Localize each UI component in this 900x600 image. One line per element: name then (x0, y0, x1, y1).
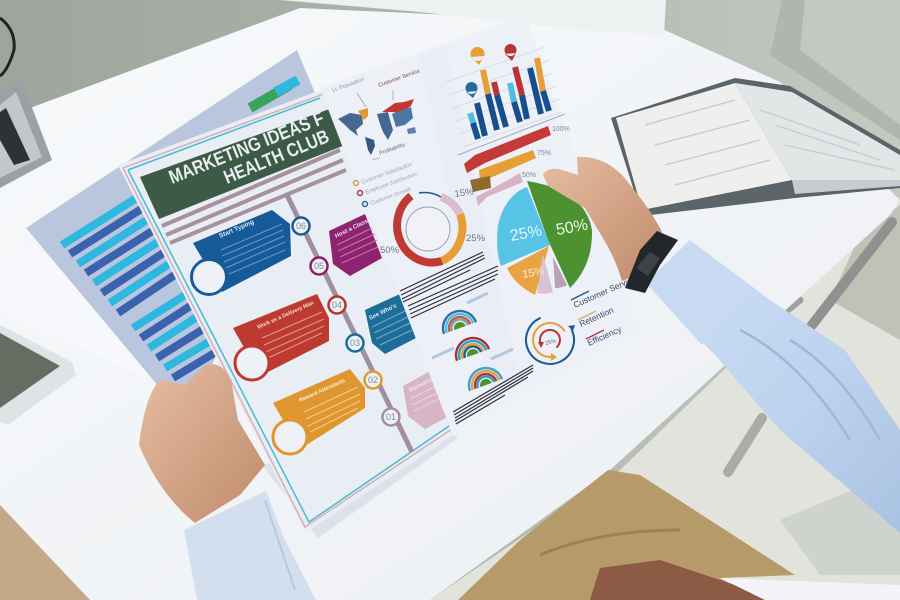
donut chart: 15% (454, 186, 475, 200)
pie chart: 25% (509, 223, 543, 245)
middle document: marketing ideas (118, 70, 458, 533)
title banner: HEALTH CLUB (221, 126, 332, 189)
border lines (123, 75, 455, 527)
right arm shirt sleeve (646, 240, 900, 533)
body text lines (400, 252, 533, 424)
chart captions (432, 293, 513, 359)
pie chart: 50% (555, 217, 589, 239)
card: marketing (403, 370, 449, 429)
card: marketing: Marketing (408, 377, 434, 394)
card: start typing: Start Typing (218, 219, 255, 240)
floor shadow (830, 205, 900, 340)
legend list (354, 162, 418, 207)
desk legs (700, 222, 892, 472)
card: host a class (329, 214, 382, 276)
card: see who's coming (365, 294, 416, 354)
left shirt cuff (184, 491, 316, 600)
floor under the desk (430, 200, 900, 600)
arrow legend: Efficiency (586, 324, 624, 348)
world map: Lt. Population (332, 77, 365, 94)
step 06: 06 (296, 221, 306, 231)
horizontal bars: 100% (552, 126, 570, 133)
step 03: 03 (350, 338, 360, 348)
step 01: 01 (386, 412, 396, 422)
back document with blue table (26, 50, 320, 412)
window frame (770, 0, 900, 140)
step 04 (328, 296, 346, 314)
notebook (611, 78, 900, 216)
pie chart: 15% (521, 265, 545, 281)
timeline spine (286, 193, 412, 452)
rainbow chart one (438, 306, 476, 334)
world map: Customer Service (378, 68, 421, 89)
trousers and chair (458, 470, 900, 600)
circular arrows (526, 318, 575, 364)
wooden floor corner (0, 505, 90, 600)
wristwatch (625, 231, 678, 293)
wire basket with scissors (0, 18, 52, 188)
card: see who's coming: See Who's (368, 303, 399, 322)
legend list: Customer Growth (370, 186, 412, 207)
rainbow chart two (451, 333, 489, 361)
top document: charts (320, 15, 638, 433)
horizontal bars: 75% (537, 150, 551, 157)
donut chart: 50% (380, 245, 400, 256)
donut chart (380, 186, 486, 263)
card: reward attendants (273, 369, 365, 454)
step 04: 04 (332, 300, 342, 310)
card: work as a delivery man (233, 294, 329, 380)
step 02: 02 (368, 375, 378, 385)
world map: Profitability (379, 142, 406, 157)
title banner: MARKETING IDEAS F (166, 108, 327, 189)
paper stack edge (262, 425, 458, 538)
monitor base (280, 0, 666, 34)
card: start typing (192, 210, 291, 294)
step 03 (346, 334, 364, 352)
step 05 (310, 258, 328, 274)
circular arrows: 25% (545, 338, 557, 347)
card: work as a delivery man: Work as a Delivery Man (256, 300, 315, 331)
donut chart: 25% (466, 233, 486, 244)
legend list: Customer Satisfaction (361, 162, 413, 186)
card: host a class: Host a Class (334, 218, 370, 240)
left hand (139, 364, 265, 523)
step 06 (292, 218, 310, 234)
card: reward attendants: Reward Attendants (298, 378, 346, 404)
horizontal bars: 50% (522, 172, 536, 179)
arrow legend (571, 273, 638, 348)
step 02 (364, 372, 382, 388)
world map (332, 68, 421, 160)
rainbow chart three (464, 363, 502, 391)
pie chart (497, 181, 592, 295)
step 05: 05 (314, 261, 324, 271)
title banner (140, 107, 345, 219)
floor tile (780, 470, 900, 575)
step 01 (382, 408, 400, 426)
title stripes (162, 150, 346, 243)
arrow legend: Retention (578, 305, 615, 329)
arrow legend: Customer Service (572, 273, 638, 310)
right hand (543, 157, 662, 281)
tablet (0, 325, 76, 425)
horizontal bars (464, 126, 570, 206)
loose document (0, 245, 160, 378)
legend list: Employee Satisfaction (365, 172, 418, 196)
bar chart with pins (446, 44, 565, 155)
